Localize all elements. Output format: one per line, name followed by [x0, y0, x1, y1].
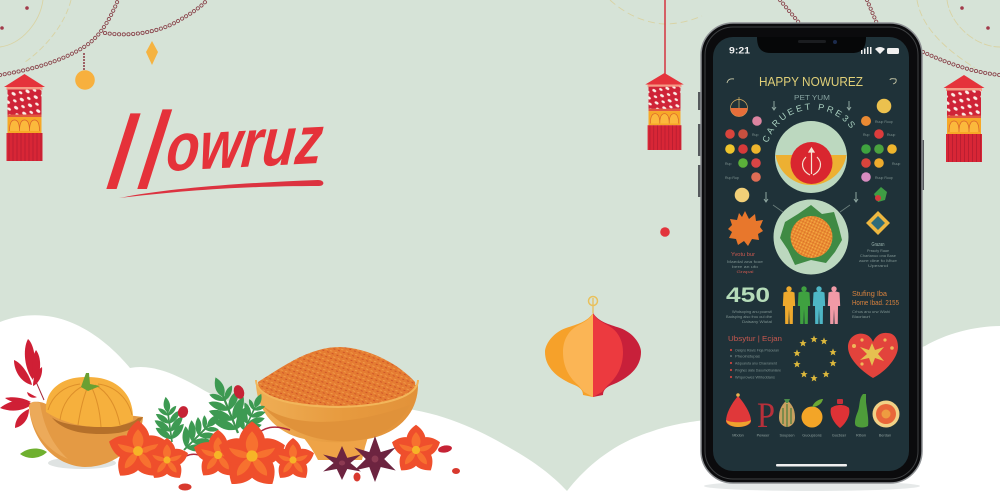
ferns	[152, 370, 273, 461]
list: Wrqurowes Whteddans	[735, 376, 775, 380]
fruit: orange	[802, 399, 823, 428]
small arrows	[764, 101, 858, 202]
right dot labels: Rup	[863, 133, 869, 137]
lantern centre	[645, 73, 684, 150]
dashed arcs left	[0, 0, 71, 62]
fruit row	[726, 393, 900, 435]
fruit labels	[732, 434, 891, 438]
chain right	[780, 0, 1000, 75]
white cloud hills	[0, 315, 1000, 504]
dark star anise	[323, 436, 396, 482]
star ring	[793, 335, 837, 381]
fruit: pear	[855, 394, 868, 428]
fruit labels: Soupsen	[780, 434, 794, 438]
phone shadow	[704, 481, 920, 491]
arc and lantern centre	[610, 0, 702, 150]
left dot labels: Rup	[752, 133, 758, 137]
red buds	[176, 384, 460, 490]
small bowl	[29, 402, 143, 467]
number caption	[726, 310, 772, 324]
sunburst caption: Maedal ana fooe	[727, 260, 763, 264]
notch	[757, 37, 866, 53]
lantern string	[664, 0, 666, 74]
fruit labels: Guoupsons	[802, 434, 822, 438]
heading: HAPPY NOWUREZ	[759, 74, 863, 89]
bowl icon	[730, 97, 748, 116]
side stat text: Crhus anu urw Wlahi	[852, 310, 890, 314]
hanging ball	[75, 53, 95, 90]
flowers	[106, 421, 443, 492]
sunburst caption: Yvotu bur	[731, 252, 755, 258]
fruit labels: Peweer	[757, 434, 770, 438]
red leaf sprig	[0, 339, 44, 428]
food illustration	[0, 339, 460, 492]
right dot labels	[863, 120, 900, 180]
list: Adquaruta anu Chaeranerd	[735, 362, 777, 366]
list	[730, 348, 781, 380]
lantern left	[4, 74, 45, 161]
fruit labels: Mbdon	[732, 434, 744, 438]
diamond caption: aure dine fo Mtue	[859, 259, 897, 263]
bowl shadow	[48, 457, 116, 469]
fruit: citrus	[872, 400, 900, 428]
list heading: Ubsytur | Ecjan	[728, 334, 782, 343]
side stat text: Stufing Iba	[852, 289, 888, 298]
left dots	[725, 97, 762, 202]
centre badge	[775, 121, 847, 193]
number caption: Whdsoping anu poarwtl	[732, 310, 772, 314]
pumpkin	[46, 373, 143, 434]
dashed arcs right	[917, 0, 1000, 68]
red dot	[660, 227, 670, 237]
fruit: strawberry	[831, 399, 849, 428]
corner flourishes	[727, 79, 896, 84]
big bowl base	[303, 437, 368, 460]
fruit: striped gourd	[779, 399, 795, 427]
phone body	[701, 23, 922, 483]
chain left	[0, 0, 207, 75]
left dot labels: Rup Rup	[725, 176, 739, 180]
dashed arc centre	[610, 0, 702, 24]
sunburst caption	[727, 252, 763, 274]
small dots right	[960, 6, 990, 30]
right dot labels: Ruup	[887, 133, 895, 137]
green leaf	[20, 448, 47, 458]
spice mound	[258, 347, 415, 406]
curved heading: CARUEET PRE3S	[762, 103, 855, 142]
onion ornament	[545, 296, 641, 397]
sunburst caption: bere an ufo	[732, 265, 758, 269]
gold diamond	[146, 41, 158, 65]
title	[99, 90, 326, 213]
status time: 9:21	[729, 46, 750, 56]
number caption: Daisany Wiutal	[742, 320, 772, 324]
fruit: letter P: P	[757, 395, 775, 435]
vine	[186, 427, 290, 459]
fruit labels: Berdan	[879, 434, 891, 438]
diamond caption: Grazan	[872, 242, 884, 248]
big number: 450	[726, 284, 770, 307]
side stat text	[852, 289, 899, 319]
right dot labels: Ruup Ruup	[875, 120, 893, 124]
connector lines	[773, 205, 850, 212]
salad icon	[874, 187, 887, 202]
inner rim	[705, 27, 918, 479]
title underline	[119, 180, 323, 198]
side stat text: Home Ibad. 2155	[852, 298, 899, 307]
diamond icon	[866, 211, 890, 235]
title: Il	[99, 90, 176, 213]
diamond caption: Prsscty Raae	[867, 249, 889, 253]
title: owruz	[164, 102, 326, 186]
status icons	[861, 47, 899, 54]
right dot labels: Ruup Ruup	[875, 176, 893, 180]
heart	[848, 333, 898, 378]
fruit labels: Ribon	[856, 434, 866, 438]
side buttons	[698, 92, 924, 197]
big bowl	[256, 385, 418, 442]
right dots	[861, 99, 897, 202]
right dot labels: Ruup	[892, 162, 900, 166]
camera	[798, 40, 837, 44]
fruit: pomegranate	[726, 393, 751, 427]
diamond caption: Chartanuo ona Base	[860, 254, 896, 258]
small dots left	[0, 6, 29, 30]
side stat text: Blaoriaurt	[852, 315, 871, 319]
list: Pinghes olate Daoumothanlane	[735, 368, 781, 372]
left dot labels	[725, 133, 758, 180]
fruit labels: Gucbser	[832, 434, 847, 438]
garland left	[0, 0, 207, 90]
number caption: Badsping also frou oul dhe	[726, 315, 772, 319]
home bar	[776, 464, 847, 466]
diamond caption	[859, 242, 897, 268]
left dot labels: Rup	[725, 162, 731, 166]
sunburst caption: Grapal	[736, 270, 754, 274]
diamond caption: Uperand	[868, 264, 888, 268]
dish plate	[774, 200, 848, 274]
subheading: PET YUM	[794, 95, 830, 102]
bowl rim	[256, 380, 418, 407]
list: Oelqns Ravis Fiqa Pnsouian	[735, 348, 779, 352]
list: Pheoinstupas	[735, 354, 760, 358]
lantern right	[944, 75, 984, 162]
phone	[698, 22, 924, 484]
people	[783, 286, 840, 324]
screen	[713, 37, 909, 471]
sunburst icon	[728, 211, 763, 246]
garland right	[780, 0, 1000, 75]
